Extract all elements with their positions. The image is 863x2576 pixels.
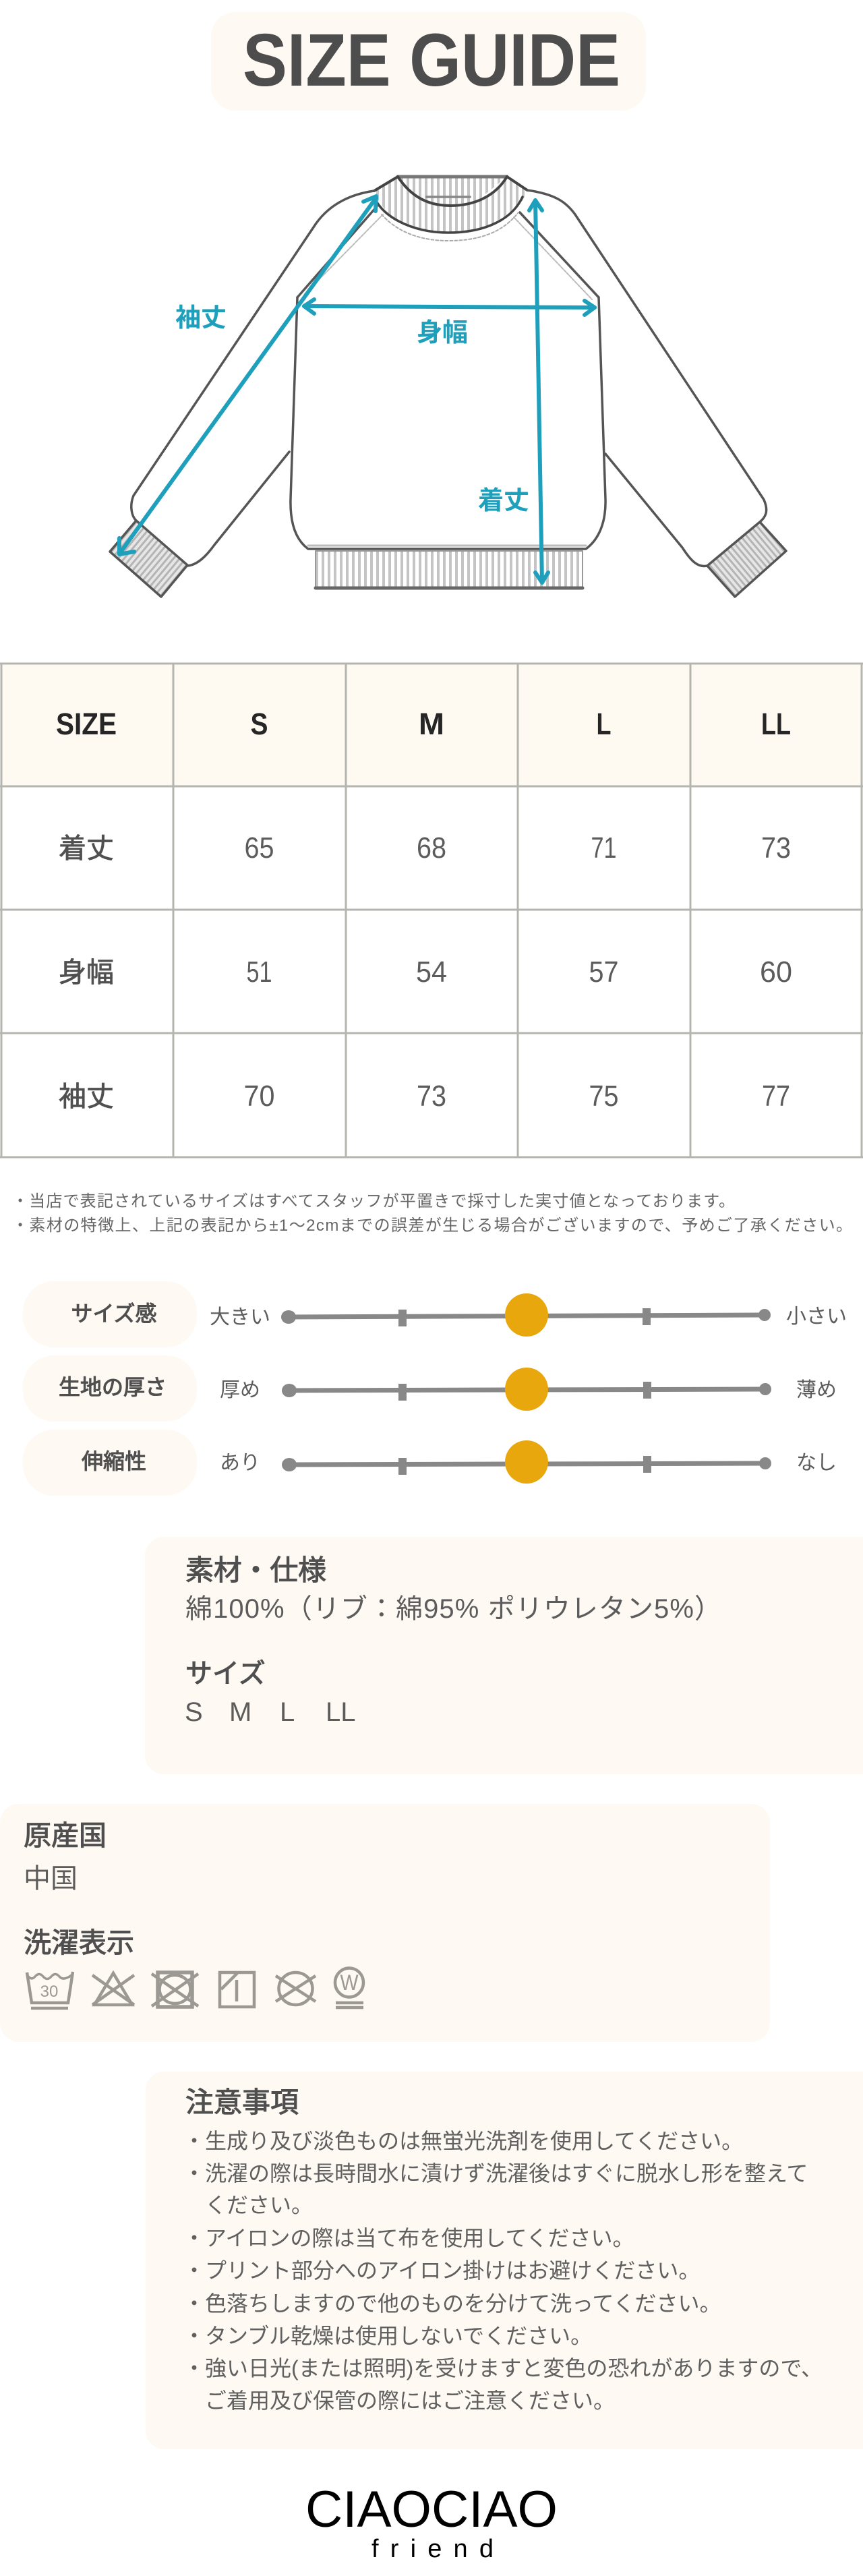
table row: 着丈: 68 (417, 831, 446, 865)
panel: care notes (146, 2072, 863, 2449)
table row: 袖丈: 73 (417, 1080, 446, 1113)
care notes list: ・色落ちしますので他のものを分けて洗ってください。 (183, 2291, 721, 2316)
measurement notes (12, 1192, 852, 1235)
label: 身幅: 身幅 (417, 319, 468, 347)
icon: wet clean (335, 1968, 363, 2008)
panel: origin and care (0, 1804, 770, 2042)
icon: sweater flat sketch (110, 177, 786, 597)
heading: 素材・仕様: 素材・仕様 (185, 1554, 326, 1586)
table row: 着丈: 73 (761, 831, 791, 865)
table row: 着丈: 71 (591, 831, 616, 865)
icon: wash 30 (27, 1972, 73, 2008)
text: size list: S (185, 1697, 203, 1727)
care notes list: ・生成り及び淡色ものは無蛍光洗剤を使用してください。 (183, 2129, 743, 2153)
table header row: LL (761, 707, 791, 741)
arrow: body width (304, 299, 595, 315)
measurement notes: ・当店で表記されているサイズはすべてスタッフが平置きで採寸した実寸値となっております。 (12, 1192, 735, 1210)
icon: line dry (220, 1972, 254, 2007)
label: 袖丈: 袖丈 (175, 304, 227, 332)
care notes list (183, 2129, 823, 2413)
rating: サイズ感 (23, 1281, 847, 1347)
care notes list: ご着用及び保管の際にはご注意ください。 (205, 2389, 615, 2413)
table row: 身幅: 51 (247, 956, 272, 989)
table row: 身幅: 身幅 (59, 957, 114, 988)
care notes list: ・タンブル乾燥は使用しないでください。 (183, 2324, 592, 2348)
icon: no bleach (92, 1973, 134, 2005)
measurement notes: ・素材の特徴上、上記の表記から±1〜2cmまでの誤差が生じる場合がございますので、予めご了承ください。 (12, 1216, 852, 1235)
rating: 伸縮性 (23, 1430, 837, 1496)
table header row: SIZE (56, 707, 117, 741)
logo: CIAOCIAO friend: CIAOCIAO (305, 2481, 558, 2538)
heading: 注意事項: 注意事項 (185, 2086, 299, 2118)
size table (0, 663, 863, 1158)
icon: no dry clean (276, 1972, 316, 2005)
panel: material and sizes (145, 1537, 863, 1774)
heading: サイズ: サイズ (185, 1659, 266, 1689)
icon: wet clean: W (340, 1970, 359, 1995)
care icons row (27, 1968, 363, 2008)
arrow: total length (529, 200, 548, 583)
table row: 袖丈 (59, 1080, 790, 1113)
rating: サイズ感: 大きい (210, 1306, 270, 1328)
table row: 身幅: 54 (416, 956, 447, 989)
rating: サイズ感: 小さい (786, 1306, 847, 1328)
table row: 身幅: 57 (589, 956, 619, 989)
heading: 原産国: 原産国 (24, 1820, 107, 1851)
rating: 伸縮性: 伸縮性 (82, 1449, 146, 1473)
table row: 着丈: 着丈 (59, 833, 114, 864)
heading: 洗濯表示: 洗濯表示 (24, 1927, 134, 1958)
table row: 袖丈: 75 (589, 1080, 619, 1113)
table row: 身幅: 60 (760, 956, 792, 989)
rating: 生地の厚さ (23, 1355, 837, 1422)
table row: 着丈 (59, 831, 791, 865)
text: fabric composition: 綿100%（リブ：綿95% ポリウレタン5%） (185, 1594, 721, 1624)
care notes list: ・プリント部分へのアイロン掛けはお避けください。 (183, 2258, 700, 2283)
rating: 生地の厚さ: 薄め (796, 1379, 837, 1401)
care notes list: ・洗濯の際は長時間水に漬けず洗濯後はすぐに脱水し形を整えて (183, 2161, 808, 2186)
rating: 伸縮性: なし (796, 1452, 837, 1474)
text: size list: LL (326, 1697, 356, 1727)
rating: 伸縮性: あり (220, 1452, 260, 1474)
label: 着丈: 着丈 (478, 487, 529, 515)
care notes list: ・強い日光(または照明)を受けますと変色の恐れがありますので、 (183, 2356, 823, 2380)
table header row: L (596, 707, 611, 741)
table row: 袖丈: 70 (244, 1080, 275, 1113)
logo: CIAOCIAO friend (305, 2481, 558, 2563)
rating: 生地の厚さ: 生地の厚さ (59, 1375, 167, 1399)
rating: 生地の厚さ: 厚め (220, 1379, 260, 1401)
table row: 袖丈: 77 (762, 1080, 790, 1113)
text: size list: M (229, 1697, 251, 1727)
logo: CIAOCIAO friend: friend (371, 2535, 494, 2563)
table row: 袖丈: 袖丈 (59, 1081, 114, 1112)
table header row: S (251, 707, 268, 741)
text: 中国: 中国 (24, 1864, 78, 1894)
table row: 身幅 (59, 956, 792, 989)
icon: wash 30: 30 (40, 1983, 58, 2001)
table header row (56, 707, 791, 741)
icon: no tumble dry (152, 1972, 198, 2007)
care notes list: ください。 (205, 2193, 313, 2217)
text: size list: L (280, 1697, 295, 1727)
rating: サイズ感: サイズ感 (71, 1301, 157, 1326)
text: size list (185, 1697, 356, 1727)
title: SIZE GUIDE: SIZE GUIDE (243, 19, 620, 102)
sweater measurement diagram (110, 177, 786, 597)
arrow: sleeve length (119, 196, 376, 554)
care notes list: ・アイロンの際は当て布を使用してください。 (183, 2226, 634, 2250)
table header row: M (419, 707, 444, 741)
table row: 着丈: 65 (244, 831, 274, 865)
